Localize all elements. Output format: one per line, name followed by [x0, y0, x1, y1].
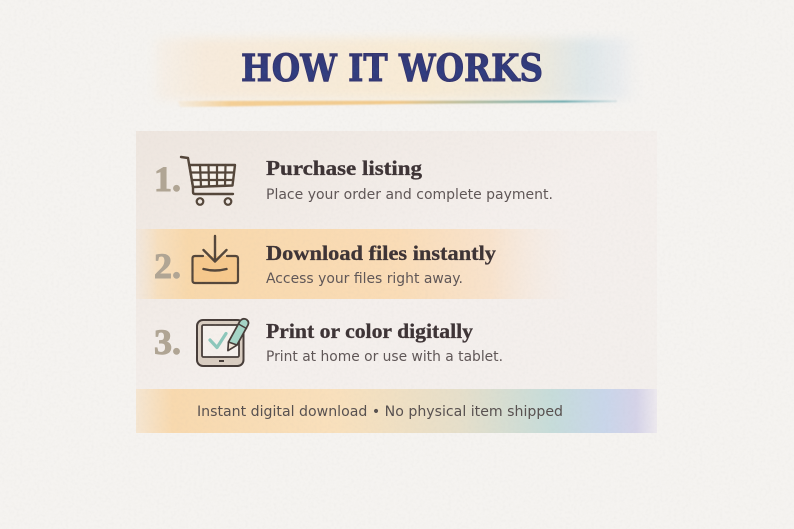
number 2: 2. — [154, 246, 181, 286]
footer text: Instant digital download • No physical item shipped — [197, 404, 563, 420]
description 3: Print at home or use with a tablet. — [266, 349, 503, 365]
description 1: Place your order and complete payment. — [266, 187, 553, 203]
number 3: 3. — [154, 322, 181, 362]
icon: shopping cart — [181, 157, 235, 205]
brush stroke behind title — [155, 38, 645, 100]
step 3 — [154, 319, 503, 366]
icon: download tray — [192, 236, 238, 283]
panel background — [136, 131, 657, 433]
title banner — [155, 38, 645, 107]
footer gradient — [136, 389, 657, 433]
description 2: Access your files right away. — [266, 271, 463, 287]
title underline stroke — [178, 100, 617, 107]
number 1: 1. — [154, 159, 181, 199]
panel: steps — [136, 131, 657, 433]
heading 2: Download files instantly — [266, 241, 497, 265]
title: HOW IT WORKS — [241, 46, 543, 90]
heading 3: Print or color digitally — [266, 319, 474, 343]
highlight band for step 2 — [136, 229, 570, 299]
heading 1: Purchase listing — [266, 156, 423, 180]
icon: tablet with pen — [197, 319, 248, 366]
step 1 — [154, 156, 553, 205]
step 2 — [154, 236, 497, 287]
footer band — [136, 389, 657, 433]
